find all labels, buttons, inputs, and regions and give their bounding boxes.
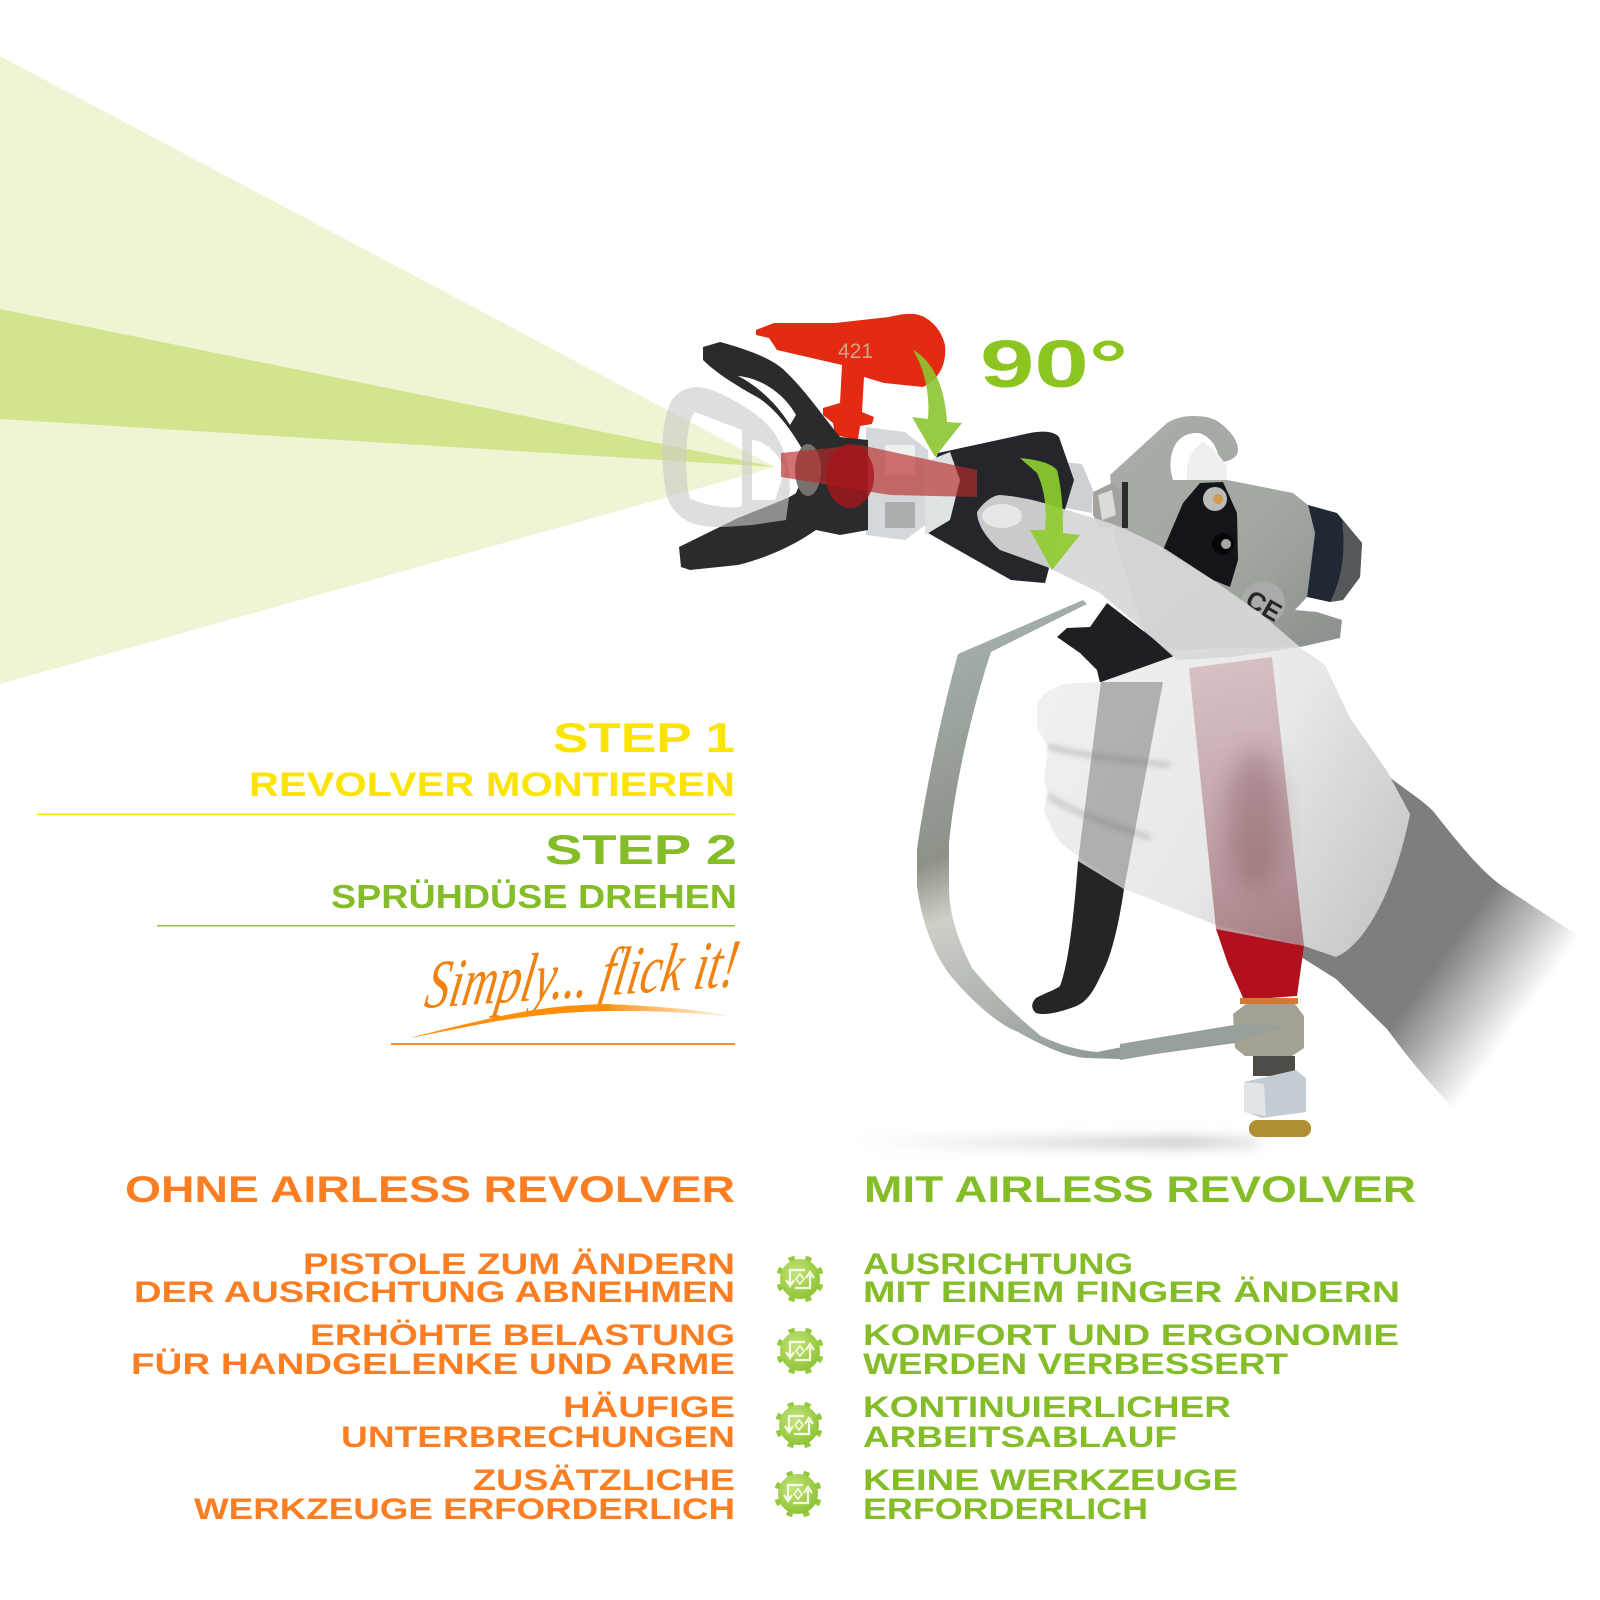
drawbacks list: UNTERBRECHUNGEN: [341, 1421, 735, 1454]
hand: [1037, 647, 1410, 957]
benefits list: KONTINUIERLICHER: [863, 1391, 1231, 1424]
rotation arrow 2: [1020, 458, 1080, 570]
washer: [925, 452, 960, 535]
drawbacks list: FÜR HANDGELENKE UND ARME: [131, 1348, 735, 1381]
benefits list: ERFORDERLICH: [863, 1493, 1148, 1526]
trigger shadow band on hand: [1078, 682, 1163, 889]
drawbacks list: WERKZEUGE ERFORDERLICH: [194, 1493, 735, 1526]
black tip guard: [679, 342, 868, 570]
spray fan: [0, 56, 775, 684]
sleeve: [1290, 775, 1600, 1125]
benefits list: KOMFORT UND ERGONOMIE: [863, 1319, 1399, 1352]
rotation angle label: 90°: [980, 327, 1128, 402]
benefits list: WERDEN VERBESSERT: [863, 1348, 1288, 1381]
rear black cap: [1307, 505, 1362, 602]
trigger lever: [1032, 861, 1124, 1014]
drawbacks list: PISTOLE ZUM ÄNDERN: [303, 1248, 735, 1281]
swivel body: [923, 432, 1074, 583]
mounting nuts: [1233, 1004, 1304, 1056]
finger creases: [1048, 746, 1170, 838]
drawbacks list: DER AUSRICHTUNG ABNEHMEN: [134, 1276, 735, 1309]
step 1 description: REVOLVER MONTIEREN: [249, 766, 735, 804]
benefits list: MIT EINEM FINGER ÄNDERN: [863, 1276, 1400, 1309]
tip key label: 421: [838, 340, 873, 363]
CE disc: CE: [1241, 584, 1287, 628]
slogan: Simply... flick it!: [420, 924, 745, 1023]
gear icons: [777, 1258, 821, 1515]
step 1 heading: STEP 1: [553, 714, 735, 761]
floor shadow: [860, 1138, 1260, 1147]
red ball: [826, 444, 874, 508]
spray gun and hand illustration: [662, 314, 1600, 1137]
gun body with hook: [1110, 416, 1342, 650]
drawbacks list: ERHÖHTE BELASTUNG: [310, 1319, 735, 1352]
pointing finger: [977, 495, 1300, 660]
drawbacks list: ZUSÄTZLICHE: [473, 1464, 735, 1497]
red lower handle: [1216, 929, 1304, 1000]
handle band on hand: [1189, 657, 1304, 946]
benefits list: KEINE WERKZEUGE: [863, 1464, 1238, 1497]
black side plate: [1163, 482, 1238, 587]
clear metal coupling nut: [866, 427, 932, 540]
white hook window: [1187, 442, 1227, 480]
drawbacks list: [131, 1248, 735, 1526]
red tip key: [756, 314, 945, 440]
left column heading: OHNE AIRLESS REVOLVER: [125, 1169, 735, 1210]
step 2 heading: STEP 2: [545, 826, 737, 873]
benefits list: ARBEITSABLAUF: [863, 1421, 1177, 1454]
rotation arrow 1: [912, 350, 962, 457]
metal tip insert: [795, 444, 821, 496]
drawbacks list: HÄUFIGE: [563, 1391, 735, 1424]
ferrule nuts: [1093, 483, 1123, 527]
benefits list: [863, 1248, 1400, 1526]
black grip: [1057, 603, 1177, 683]
step 2 description: SPRÜHDÜSE DREHEN: [331, 878, 737, 915]
slogan: [410, 924, 745, 1038]
red translucent cylinder: [781, 445, 977, 497]
benefits list: AUSRICHTUNG: [863, 1248, 1133, 1281]
right column heading: MIT AIRLESS REVOLVER: [864, 1169, 1416, 1210]
metal trigger guard: [917, 600, 1235, 1059]
transparent ghost tip guard: [662, 387, 790, 527]
